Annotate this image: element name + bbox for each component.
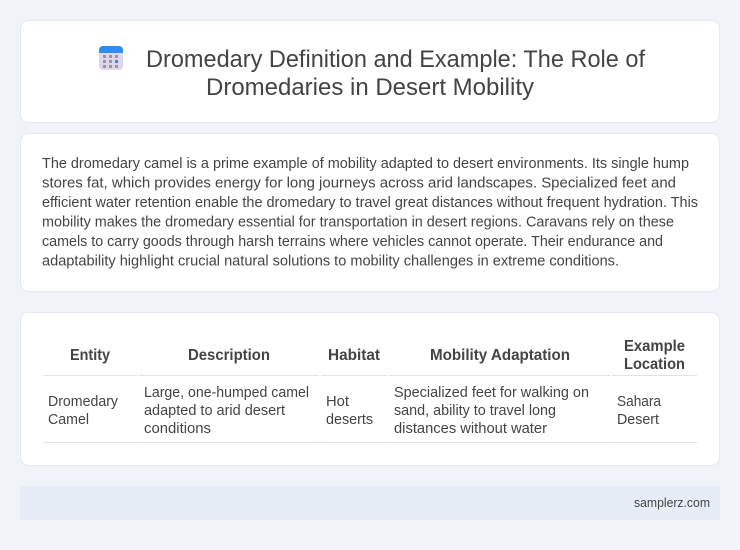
text block: description paragraph: mobility makes the dromedary essential for transportation in desert regions. Caravans rely on these (42, 214, 674, 230)
table row: dromedary camel: Large, one-humped camel (144, 385, 309, 401)
table header: Location (624, 356, 685, 373)
table row: dromedary camel (48, 385, 662, 437)
text block: description paragraph: stores fat, which provides energy for long journeys across arid landscapes. Specialized feet and (42, 176, 676, 192)
table header: Example (624, 338, 685, 355)
table row: dromedary camel: adapted to arid desert (144, 403, 285, 419)
title: Dromedary Definition and Example: The Role of (146, 46, 645, 73)
table row: dromedary camel: distances without water (394, 421, 547, 437)
title (146, 46, 645, 101)
table row: dromedary camel: Dromedary (48, 394, 119, 410)
icon: calendar (99, 46, 123, 70)
table header: Entity (70, 347, 110, 364)
table row: dromedary camel: Sahara (617, 394, 662, 410)
text block: description paragraph: The dromedary camel is a prime example of mobility adapted to desert environments. Its single hump (42, 156, 689, 172)
text block: description paragraph: camels to carry goods through harsh terrains where vehicles cannot operate. Their endurance and (42, 234, 663, 250)
text block: description paragraph: efficient water retention enable the dromedary to travel great distances without frequent hydration. This (42, 195, 698, 211)
panel: title card (20, 20, 720, 122)
text block: description paragraph (42, 156, 698, 270)
table row: dromedary camel: deserts (326, 412, 373, 428)
panel: description (20, 134, 720, 292)
table header: Description (188, 347, 270, 364)
text block: description paragraph: adaptability highlight crucial natural solutions to mobility challenges in extreme conditions. (42, 254, 619, 270)
table row: dromedary camel: Desert (617, 412, 659, 428)
footer credit: samplerz.com (634, 496, 710, 510)
table row: dromedary camel: Specialized feet for walking on (394, 385, 589, 401)
table row: dromedary camel: Hot (326, 394, 349, 410)
table row: dromedary camel: Camel (48, 412, 89, 428)
panel: table card (20, 312, 720, 466)
table row: dromedary camel: sand, ability to travel long (394, 403, 556, 419)
title: Dromedaries in Desert Mobility (206, 74, 535, 101)
table row: dromedary camel: conditions (144, 421, 211, 437)
footer bar (20, 486, 720, 520)
table header: Mobility Adaptation (430, 347, 570, 364)
table header: Habitat (328, 347, 381, 364)
table header (70, 338, 685, 373)
